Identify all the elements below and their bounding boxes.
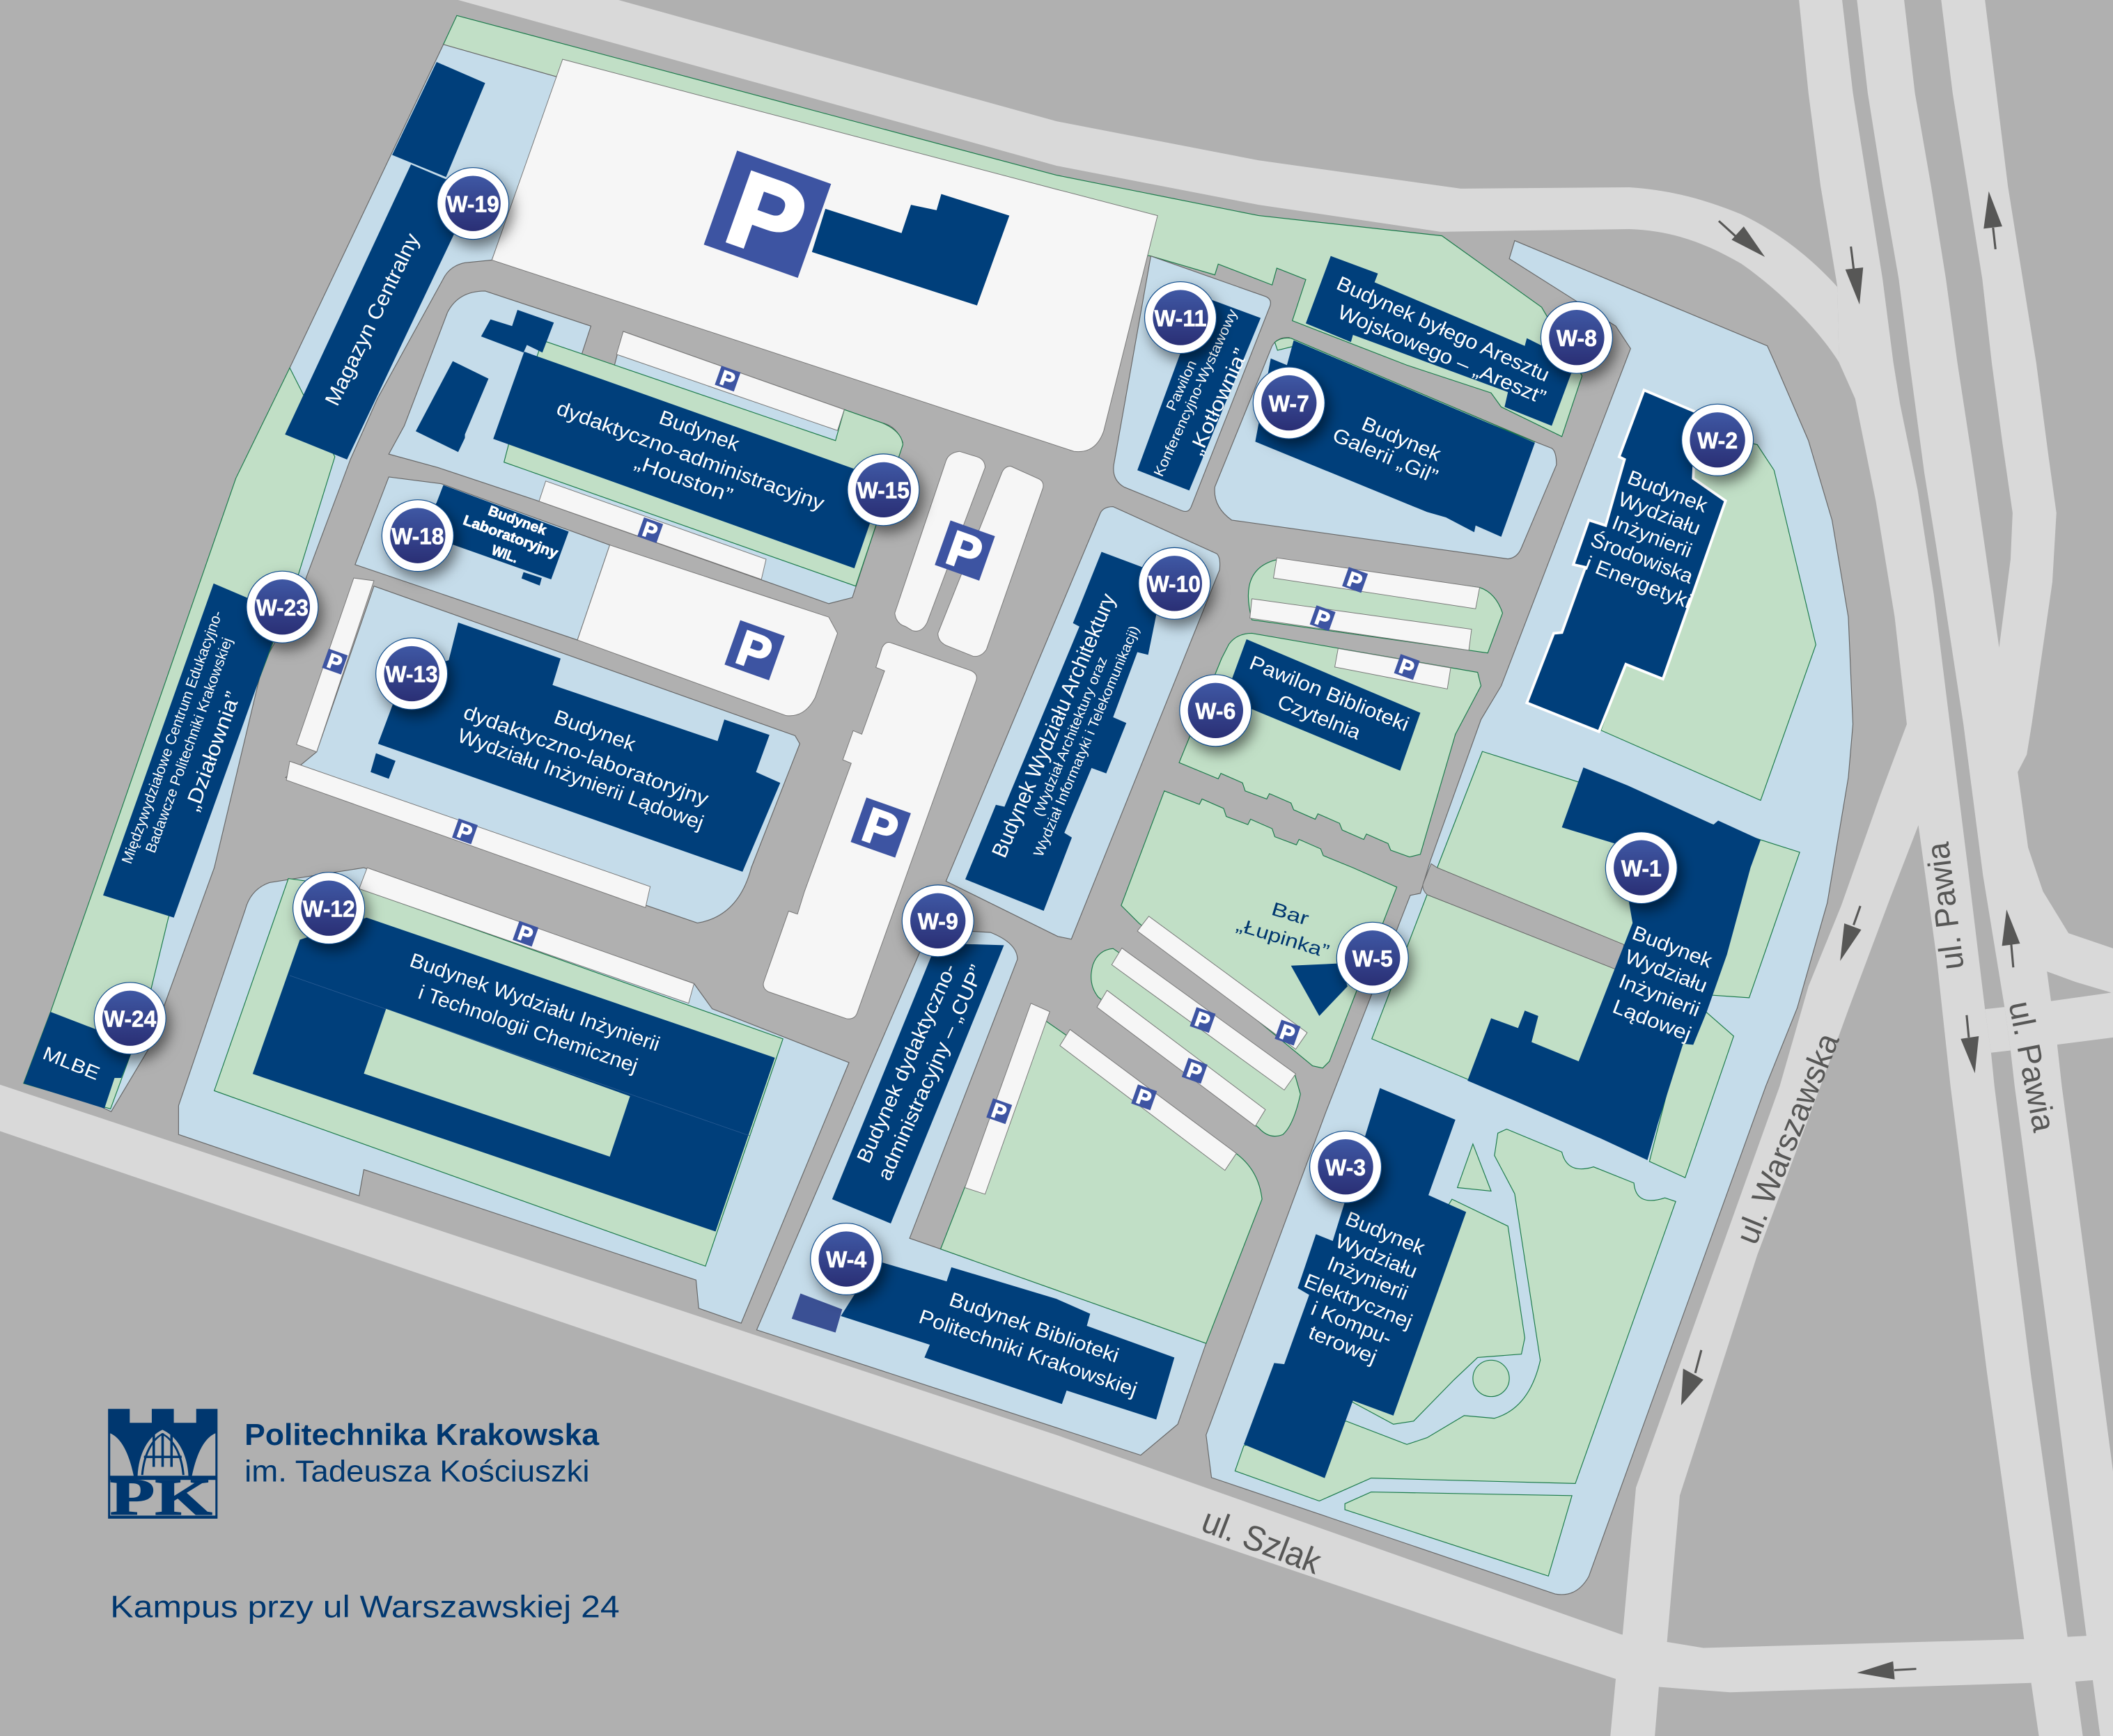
- parking strips: [286, 331, 1480, 1194]
- building: Magazyn Centralny: [285, 164, 474, 460]
- badge: W-1: [1605, 832, 1677, 904]
- label: W-3: Inżynierii: [1324, 1253, 1411, 1305]
- badge: W-12: W-12: [303, 896, 355, 922]
- badge: W-6: W-6: [1195, 698, 1235, 724]
- logo: Politechnika Krakowska emblem: PK: [110, 1469, 212, 1526]
- panel: park east: [1235, 1129, 1676, 1501]
- buildings: [24, 62, 1761, 1478]
- badge: W-9: [902, 885, 974, 957]
- panel: park south: [1345, 1492, 1572, 1576]
- badge: W-4: [811, 1223, 882, 1295]
- label: W-3: [1301, 1207, 1428, 1369]
- P: north strip 2: P: [1312, 606, 1333, 632]
- P: north strip 1: P: [1344, 568, 1365, 594]
- panel: main parking lot: [492, 59, 1157, 452]
- panel: W-13 island: [286, 586, 800, 923]
- label: W-9: Budynek dydaktyczno-: [853, 960, 961, 1166]
- label: Działownia: Międzywydziałowe Centrum Edukacyjno-: [118, 609, 226, 866]
- badge: W-4: W-4: [826, 1247, 867, 1273]
- badge: W-9: W-9: [918, 909, 958, 935]
- badge: W-23: [247, 571, 318, 643]
- P: central strip: P: [940, 520, 989, 582]
- label: W-11: Pawilon: [1164, 358, 1200, 414]
- label: W-7: Budynek: [1358, 413, 1444, 466]
- building: W-13: [378, 623, 780, 872]
- arrow: Pawia middle down: [1960, 1015, 1979, 1073]
- road between W-1 greens: [1423, 863, 1624, 971]
- badge: W-11: [1145, 282, 1216, 354]
- label: W-1: Inżynierii: [1616, 970, 1703, 1022]
- building: Magazyn annex: [392, 62, 485, 177]
- panel: Houston green: [504, 341, 903, 586]
- badge: W-18: W-18: [391, 524, 444, 549]
- panel: W-1 lower green: [1372, 895, 1621, 1086]
- panel: west green strip: [24, 368, 335, 1109]
- panel: W-2 green: [1601, 431, 1816, 800]
- badge: W-2: W-2: [1697, 428, 1738, 454]
- panel: Houston island: [389, 291, 903, 604]
- label: W-1: Budynek: [1629, 922, 1715, 973]
- label: W-9: administracyjny – „CUP”: [873, 962, 989, 1184]
- logo wordmark: im. Tadeusza Kościuszki: [244, 1455, 590, 1489]
- badge: W-8: W-8: [1557, 326, 1597, 352]
- label: Bar Łupinka: [1234, 898, 1332, 962]
- badge: W-13: W-13: [386, 662, 438, 688]
- label: W-1: [1609, 922, 1715, 1046]
- label: W-6: Pawilon Biblioteki: [1246, 652, 1412, 736]
- building: W-18 annex: [522, 572, 542, 586]
- panel: W-1 right green: [1649, 1012, 1733, 1178]
- arrow: Warszawska lower: [1681, 1350, 1703, 1405]
- label: W-18: Laboratoryjny: [461, 513, 561, 561]
- label: Działownia: Badawcze Politechniki Krakowskiej: [142, 635, 236, 855]
- building labels: [40, 230, 1715, 1401]
- label: W-6: Czytelnia: [1274, 691, 1364, 744]
- arrow: Pawia middle up: [2002, 909, 2020, 967]
- P: W-9 strip: P: [988, 1099, 1009, 1125]
- building: W-13 annex: [371, 753, 396, 779]
- building: W-12: [253, 918, 775, 1232]
- panel: parking green north: [1248, 560, 1502, 653]
- badge: W-8: [1541, 302, 1612, 373]
- label: W-11: „Kotłownia”: [1185, 345, 1253, 459]
- P: south strip 4: P: [1133, 1085, 1154, 1111]
- label: W-4: Budynek Biblioteki: [946, 1288, 1122, 1368]
- W-12 inner courtyard: [364, 1009, 630, 1157]
- badge: W-3: W-3: [1325, 1155, 1366, 1181]
- label: W-18: Budynek: [486, 503, 549, 538]
- building: W-4 library: [841, 1260, 1174, 1419]
- label: W-3: Wydziału: [1332, 1230, 1421, 1283]
- label: W-1: Lądowej: [1609, 996, 1694, 1046]
- panel: W-12 green: [215, 879, 783, 1266]
- label: W-13: dydaktyczno-laboratoryjny: [460, 701, 712, 811]
- label: ul. Pawia right: ul. Pawia: [2002, 998, 2063, 1135]
- panel: W-10 island: [946, 507, 1220, 939]
- park triangle: [1458, 1144, 1491, 1191]
- building: W-6: [1225, 639, 1420, 771]
- label: W-3: i Kompu-: [1308, 1298, 1395, 1350]
- label: W-7: Galerii „Gil”: [1330, 424, 1441, 488]
- badge: W-2: [1682, 404, 1754, 476]
- arrow: Pawia north up: [1983, 191, 2002, 249]
- P: W-13 west: P: [324, 649, 345, 675]
- logo wordmark: Politechnika Krakowska: [244, 1418, 600, 1452]
- label: W-18: WIL.: [490, 542, 520, 566]
- W-7 green sliver: [1274, 338, 1535, 442]
- building: small Houston west: [416, 361, 488, 452]
- label: Houston: „Houston”: [632, 451, 735, 507]
- building: W-10: [965, 552, 1164, 911]
- P: Houston north: P: [717, 366, 738, 393]
- label: Bar Łupinka: „Łupinka”: [1234, 914, 1332, 962]
- panel: W-18 parking: [577, 545, 838, 716]
- label: W-11: Konferencyjno-Wystawowy: [1151, 306, 1241, 479]
- P: south strip 2: P: [1192, 1008, 1213, 1034]
- badge: W-19: W-19: [447, 191, 499, 217]
- label: ul. Pawia left: ul. Pawia: [1919, 840, 1971, 972]
- traffic arrows: [1681, 191, 2020, 1680]
- label: W-2: Inżynierii: [1609, 512, 1695, 563]
- badge: W-24: [94, 983, 166, 1054]
- badge: W-3: [1310, 1131, 1382, 1203]
- badge: W-18: [382, 500, 453, 572]
- title: Kampus przy ul Warszawskiej 24: [110, 1590, 620, 1625]
- panel: W-1 upper green: [1437, 751, 1800, 998]
- label: W-2: i Energetyki: [1582, 552, 1694, 613]
- parking signs: [321, 144, 1420, 1126]
- panel: W-12 island: [178, 868, 849, 1323]
- building: W-18: [418, 485, 569, 579]
- label: W-10: (Wydział Architektury oraz: [1031, 655, 1111, 819]
- arrow: north road: [1719, 221, 1765, 257]
- label: W-2: Budynek: [1624, 467, 1710, 517]
- badge: W-19: [437, 168, 509, 240]
- badge: W-5: [1336, 922, 1408, 994]
- label: W-10: Budynek Wydziału Architektury: [987, 590, 1121, 861]
- label: Działownia: „Działownia”: [180, 689, 245, 814]
- logo wordmark: [244, 1418, 600, 1489]
- badge: W-11: W-11: [1154, 306, 1207, 331]
- panel: parking green south: [1091, 948, 1300, 1136]
- label: W-4: Politechniki Krakowskiej: [916, 1306, 1140, 1401]
- building: W-23 Działownia: [103, 584, 283, 918]
- label: ul. Szlak: ul. Szlak: [1196, 1500, 1327, 1582]
- label: ul. Warszawska: ul. Warszawska: [1729, 1028, 1846, 1249]
- panel: west blue strip: [40, 45, 559, 1111]
- panel: W-11 island: [1114, 256, 1270, 511]
- badge: W-24: W-24: [104, 1006, 157, 1032]
- building: W-11: [1137, 296, 1261, 490]
- label: Areszt: Budynek byłego Aresztu: [1333, 272, 1553, 386]
- P: Houston south: P: [639, 518, 660, 545]
- building: main parking block: [812, 194, 1009, 306]
- panel: W-18 island: [355, 477, 610, 640]
- panel: park inner: [1351, 1199, 1525, 1424]
- building: Houston: [493, 352, 885, 568]
- building: W-2: [1527, 390, 1726, 732]
- label: MLBE: MLBE: [40, 1042, 103, 1084]
- panel: W-7 Gil island: [1215, 338, 1557, 559]
- label: W-3: terowej: [1305, 1322, 1380, 1369]
- street labels: [1196, 840, 2063, 1582]
- label: W-13: Budynek: [551, 706, 639, 756]
- label: W-1: Wydziału: [1622, 946, 1710, 997]
- label: W-10: Wydział Informatyki i Telekomunikacji): [1031, 624, 1143, 859]
- panel: green lot south: [941, 1020, 1262, 1343]
- badge: W-13: [376, 638, 448, 710]
- label: Houston: dydaktyczno-administracyjny: [554, 398, 827, 515]
- badge: W-6: [1180, 675, 1252, 746]
- badge: W-5: W-5: [1352, 946, 1393, 972]
- panel: W-9 and W-4 island: [756, 930, 1206, 1455]
- badge: W-12: [293, 873, 365, 944]
- P: W-12: P: [515, 921, 536, 948]
- W-4 entrance box: [792, 1294, 842, 1333]
- building: W-7 Gil: [1255, 341, 1535, 537]
- P: W-18 lot: P: [730, 620, 779, 682]
- label: W-18: [461, 503, 561, 566]
- park circle: [1473, 1360, 1509, 1397]
- panel: east campus island: [1206, 241, 1853, 1595]
- badge: W-10: W-10: [1148, 572, 1201, 597]
- label: W-3: Budynek: [1342, 1207, 1428, 1260]
- label: W-13: Wydziału Inżynierii Lądowej: [455, 725, 707, 834]
- logo: Politechnika Krakowska emblem: [108, 1409, 217, 1526]
- badge: W-10: [1139, 547, 1210, 619]
- building: small Houston north: [481, 310, 554, 352]
- P: south strip 1: P: [1277, 1020, 1297, 1047]
- panel: W-5 green: [1121, 791, 1397, 1068]
- building: Bar Łupinka: [1291, 963, 1348, 1016]
- label: W-3: Elektrycznej: [1301, 1270, 1415, 1334]
- label: W-2: [1582, 467, 1710, 613]
- building: W-1: [1467, 767, 1761, 1160]
- label: W-12: Budynek Wydziału Inżynierii: [407, 949, 662, 1056]
- panel: north green strip: [444, 15, 1582, 437]
- label: Houston: Budynek: [656, 407, 742, 456]
- building number badges: [94, 168, 1754, 1295]
- badge: W-7: W-7: [1269, 391, 1309, 417]
- panel: W-6 green: [1179, 633, 1481, 857]
- building: W-9: [832, 943, 1004, 1223]
- label: W-2: Środowiska: [1587, 528, 1697, 588]
- badge: W-15: W-15: [857, 478, 910, 504]
- building: MLBE: [24, 1012, 134, 1109]
- label: W-12: i Technologii Chemicznej: [415, 981, 641, 1077]
- P: long strip: P: [856, 797, 905, 859]
- P: south strip 3: P: [1184, 1058, 1205, 1085]
- badge: W-15: [848, 454, 919, 526]
- label: Bar Łupinka: Bar: [1269, 898, 1311, 930]
- arrow: Warszawska upper: [1840, 906, 1862, 961]
- label: Areszt: Wojskowego – „Areszt”: [1334, 301, 1549, 409]
- badge: W-23: W-23: [256, 595, 309, 621]
- P: north strip 3: P: [1396, 655, 1417, 681]
- building: Areszt: [1306, 256, 1575, 425]
- arrow: Pawia north down: [1846, 247, 1863, 304]
- label: Magazyn Centralny: Magazyn Centralny: [321, 230, 424, 409]
- P: W-13 south: P: [454, 819, 475, 845]
- badge: W-7: [1253, 367, 1325, 439]
- P: main: P: [714, 149, 820, 283]
- label: W-2: Wydziału: [1615, 488, 1703, 540]
- arrow: south road: [1857, 1661, 1916, 1680]
- building: W-3: [1244, 1088, 1466, 1478]
- badge: W-1: W-1: [1621, 856, 1662, 882]
